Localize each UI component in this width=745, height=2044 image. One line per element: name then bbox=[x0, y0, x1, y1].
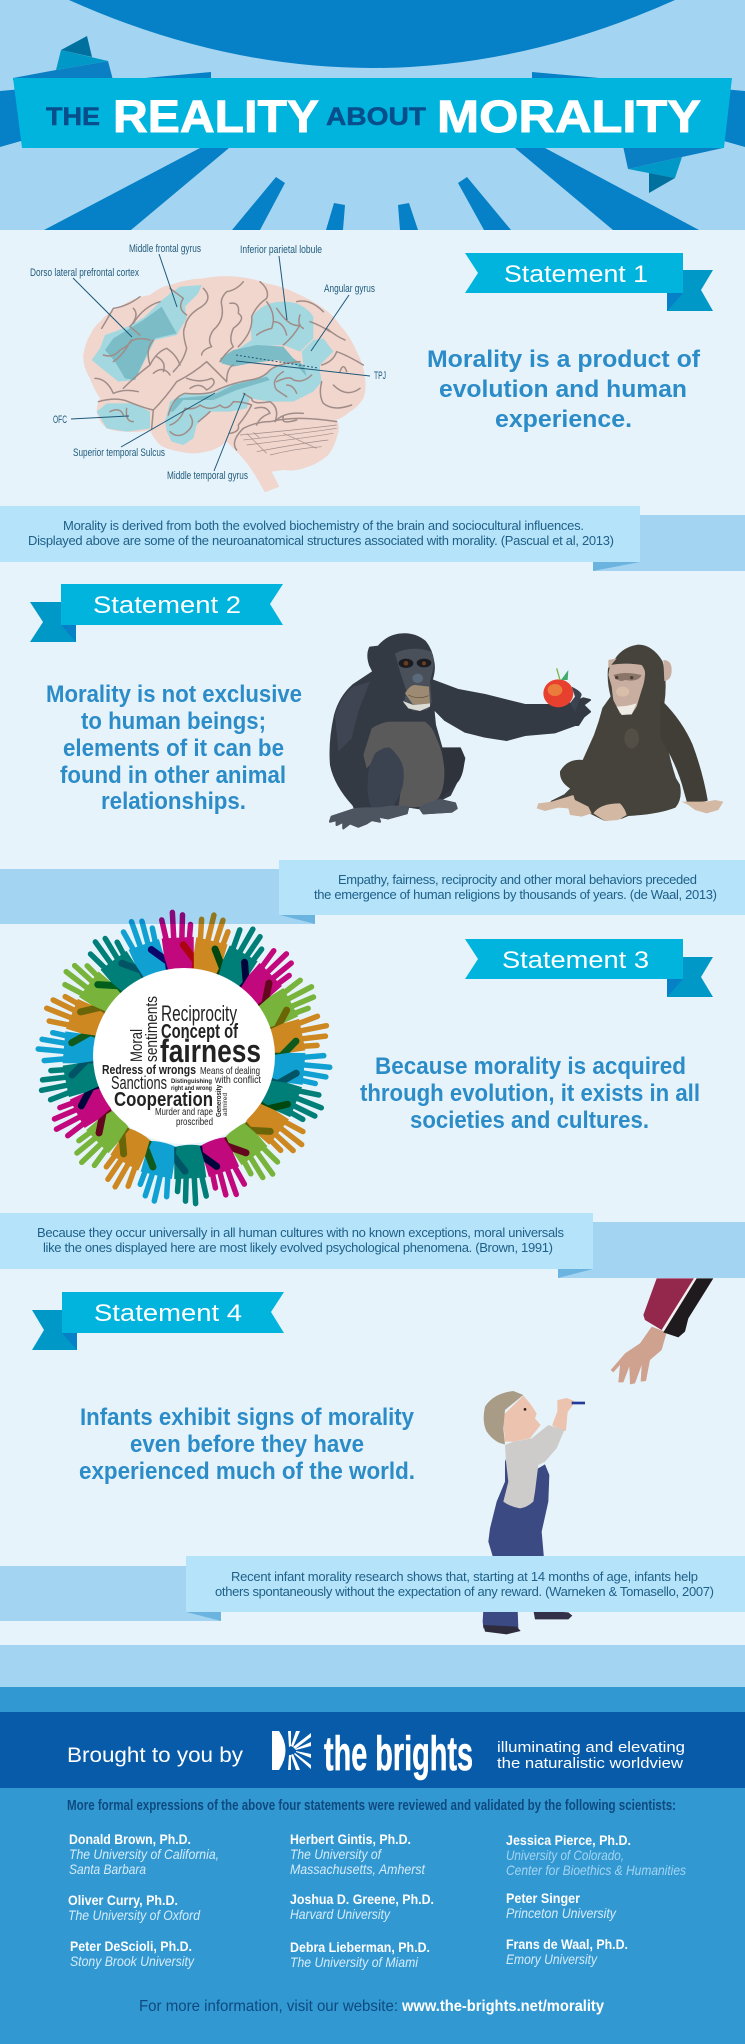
brights banner: illuminating and elevating bbox=[497, 1739, 685, 1756]
illustration: apple bbox=[543, 668, 582, 712]
statement 3 heading: Because morality is acquired bbox=[375, 1053, 686, 1080]
word cloud: fairness bbox=[160, 1033, 261, 1069]
scientists column 3: University of Colorado, bbox=[506, 1847, 624, 1863]
highlighted regions bbox=[92, 285, 333, 445]
statement 2 heading: relationships. bbox=[101, 788, 246, 815]
statement 3 heading bbox=[360, 1053, 700, 1134]
ribbon: statement 2: Statement 2 bbox=[93, 592, 241, 619]
scientists column 3 bbox=[506, 1832, 686, 1967]
note: statement 1: Displayed above are some of the neuroanatomical structures associated with morality. (Pascual et al, 2013) bbox=[28, 533, 614, 548]
illustration: toddler bbox=[483, 1391, 585, 1634]
note: statement 3: like the ones displayed here are most likely evolved psychological phenomena. (Brown, 1991) bbox=[43, 1240, 553, 1255]
word cloud bbox=[102, 996, 261, 1128]
note: statement 1 bbox=[0, 506, 745, 571]
statement 4 heading: experienced much of the world. bbox=[79, 1458, 415, 1485]
illustration: young chimpanzee bbox=[537, 646, 723, 821]
scientists column 2: The University of Miami bbox=[290, 1954, 419, 1970]
title: THE bbox=[46, 103, 100, 131]
brights banner: the brights bbox=[324, 1728, 473, 1781]
panel: statement 2 bbox=[0, 584, 745, 924]
statement 1 heading: experience. bbox=[495, 406, 632, 433]
word cloud: Moral bbox=[127, 1029, 146, 1062]
ribbon: statement 4: Statement 4 bbox=[94, 1300, 242, 1327]
panel: statement 4 bbox=[0, 1278, 745, 1634]
title: ABOUT bbox=[326, 103, 426, 131]
illustration: adult chimpanzee offering apple bbox=[330, 634, 590, 828]
header bbox=[0, 0, 745, 230]
illustration: adult hand and sleeve bbox=[611, 1278, 713, 1384]
note: statement 2: the emergence of human religions by thousands of years. (de Waal, 2013) bbox=[314, 887, 717, 902]
brain labels: Middle temporal gyrus bbox=[167, 470, 248, 482]
note: statement 2 bbox=[0, 860, 745, 924]
scientists column 2: Harvard University bbox=[290, 1906, 391, 1922]
statement 4 heading: Infants exhibit signs of morality bbox=[80, 1404, 415, 1431]
scientists column 2: Joshua D. Greene, Ph.D. bbox=[290, 1891, 434, 1907]
scientists column 1: Stony Brook University bbox=[70, 1953, 195, 1969]
light band above footer bbox=[0, 1645, 745, 1687]
scientists column 3: Center for Bioethics & Humanities bbox=[506, 1862, 686, 1878]
brain labels: TPJ bbox=[374, 370, 386, 382]
statement 2 heading: found in other animal bbox=[60, 762, 286, 789]
brights banner bbox=[0, 1712, 745, 1788]
word cloud: Concept of bbox=[161, 1021, 238, 1043]
word cloud: Reciprocity bbox=[161, 1001, 237, 1026]
word cloud: Murder and rape bbox=[155, 1107, 213, 1118]
knee bbox=[440, 748, 464, 800]
scientists column 2 bbox=[290, 1831, 434, 1970]
hands circle bbox=[36, 910, 332, 1206]
lower legs and shoes bbox=[483, 1610, 518, 1628]
website line: www.the-brights.net/morality bbox=[401, 1998, 604, 2015]
icon: brights logo bbox=[272, 1731, 311, 1770]
note: statement 3 bbox=[0, 1213, 745, 1278]
brights banner: Brought to you by bbox=[67, 1744, 244, 1767]
brain labels: Dorso lateral prefrontal cortex bbox=[30, 267, 139, 279]
scientists column 2: Debra Lieberman, Ph.D. bbox=[290, 1939, 430, 1955]
overalls bbox=[488, 1443, 549, 1558]
face bbox=[395, 649, 434, 711]
statement 1 heading bbox=[427, 346, 701, 433]
hands and feet bbox=[330, 800, 457, 828]
statement 2 heading: to human beings; bbox=[81, 708, 266, 735]
thigh bbox=[367, 748, 404, 808]
dark blue sun arc bbox=[69, 0, 675, 68]
brain labels: OFC bbox=[53, 414, 67, 426]
hands and feet bbox=[537, 795, 592, 817]
word cloud: Sanctions bbox=[111, 1073, 167, 1093]
word cloud: Generosity bbox=[216, 1085, 223, 1117]
cerebellum bbox=[240, 425, 337, 455]
website line bbox=[139, 1998, 604, 2015]
note: statement 4: Recent infant morality research shows that, starting at 14 months of age, infants help bbox=[231, 1569, 698, 1584]
chest bbox=[624, 728, 639, 748]
word cloud: sentiments bbox=[142, 996, 161, 1062]
statement 4 heading: even before they have bbox=[130, 1431, 364, 1458]
statement 2 heading bbox=[46, 681, 302, 815]
scientists column 2: Massachusetts, Amherst bbox=[290, 1861, 426, 1877]
sun rays bbox=[44, 148, 699, 230]
word cloud: proscribed bbox=[176, 1117, 213, 1128]
scientists column 1: The University of Oxford bbox=[68, 1907, 201, 1923]
word cloud: right and wrong bbox=[171, 1085, 212, 1092]
footer bbox=[0, 1687, 745, 2044]
right arm bbox=[662, 702, 707, 803]
scientists column 3: Peter Singer bbox=[506, 1890, 580, 1906]
note: statement 1: Morality is derived from both the evolved biochemistry of the brain and sociocultural influences. bbox=[63, 518, 584, 533]
scientists column 1: Peter DeScioli, Ph.D. bbox=[70, 1938, 192, 1954]
word cloud: Redress of wrongs bbox=[102, 1062, 196, 1077]
brain labels: Superior temporal Sulcus bbox=[73, 447, 165, 459]
scientists column 2: Herbert Gintis, Ph.D. bbox=[290, 1831, 411, 1847]
brights banner: the naturalistic worldview bbox=[497, 1755, 683, 1772]
scientists column 1 bbox=[68, 1831, 219, 1969]
title: REALITY bbox=[113, 91, 319, 142]
note: statement 3: Because they occur universally in all human cultures with no known exceptions, moral universals bbox=[37, 1225, 564, 1240]
website line: For more information, visit our website: bbox=[139, 1998, 398, 2015]
ribbon: statement 4 bbox=[32, 1292, 284, 1350]
statement 3 heading: through evolution, it exists in all bbox=[360, 1080, 700, 1107]
scientists column 3: Princeton University bbox=[506, 1905, 617, 1921]
hair bbox=[484, 1391, 523, 1444]
fur highlights bbox=[335, 682, 370, 752]
title: MORALITY bbox=[437, 91, 701, 142]
scientists column 1: Donald Brown, Ph.D. bbox=[69, 1831, 191, 1847]
title bbox=[46, 91, 701, 142]
brain labels: Inferior parietal lobule bbox=[240, 244, 322, 256]
shirt bbox=[503, 1425, 564, 1508]
statement 1 heading: Morality is a product of bbox=[427, 346, 701, 373]
belly bbox=[363, 722, 444, 808]
statement 3 heading: societies and cultures. bbox=[410, 1107, 649, 1134]
brain labels: Middle frontal gyrus bbox=[129, 243, 201, 255]
ribbon: statement 1: Statement 1 bbox=[504, 261, 648, 288]
arm bbox=[553, 1399, 573, 1430]
statement 4 heading bbox=[79, 1404, 415, 1485]
ribbon: statement 1 bbox=[465, 253, 713, 311]
note: statement 4 bbox=[0, 1556, 745, 1621]
scientists column 3: Jessica Pierce, Ph.D. bbox=[506, 1832, 631, 1848]
word cloud: Means of dealing bbox=[200, 1065, 260, 1077]
word cloud: with conflict bbox=[214, 1075, 261, 1086]
ribbon: statement 3: Statement 3 bbox=[502, 947, 649, 974]
ribbon folds bbox=[13, 36, 723, 193]
note: statement 4: others spontaneously without the expectation of any reward. (Warneken & Tomasello, 2007) bbox=[215, 1584, 714, 1599]
statement 2 heading: elements of it can be bbox=[63, 735, 284, 762]
brain folds bbox=[95, 282, 363, 450]
back ribbon bbox=[0, 72, 745, 148]
panel: statement 1 bbox=[0, 243, 745, 571]
ribbon: statement 3 bbox=[465, 939, 713, 997]
statement 1 heading: evolution and human bbox=[439, 376, 687, 403]
scientists column 3: Frans de Waal, Ph.D. bbox=[506, 1936, 628, 1952]
scientists column 1: The University of California, bbox=[69, 1846, 219, 1862]
brain labels: Angular gyrus bbox=[324, 283, 375, 295]
word cloud: Cooperation bbox=[114, 1089, 213, 1111]
face bbox=[608, 664, 645, 714]
word cloud: Distinguishing bbox=[171, 1078, 212, 1085]
word cloud: admired bbox=[222, 1093, 229, 1116]
scientists column 1: Oliver Curry, Ph.D. bbox=[68, 1892, 178, 1908]
scientists column 3: Emory University bbox=[506, 1951, 598, 1967]
panel: statement 3 bbox=[0, 910, 745, 1278]
scientists column 2: The University of bbox=[290, 1846, 383, 1862]
statement 2 heading: Morality is not exclusive bbox=[46, 681, 302, 708]
ears bbox=[663, 660, 672, 681]
ribbon: statement 2 bbox=[30, 584, 283, 642]
marker bbox=[572, 1402, 585, 1404]
brain labels bbox=[30, 243, 386, 482]
scientists column 1: Santa Barbara bbox=[69, 1861, 146, 1877]
title banner bbox=[13, 78, 732, 148]
note: statement 2: Empathy, fairness, reciprocity and other moral behaviors preceded bbox=[338, 872, 697, 887]
brain illustration bbox=[83, 276, 366, 492]
face bbox=[503, 1396, 541, 1442]
dark regions bbox=[105, 307, 307, 412]
